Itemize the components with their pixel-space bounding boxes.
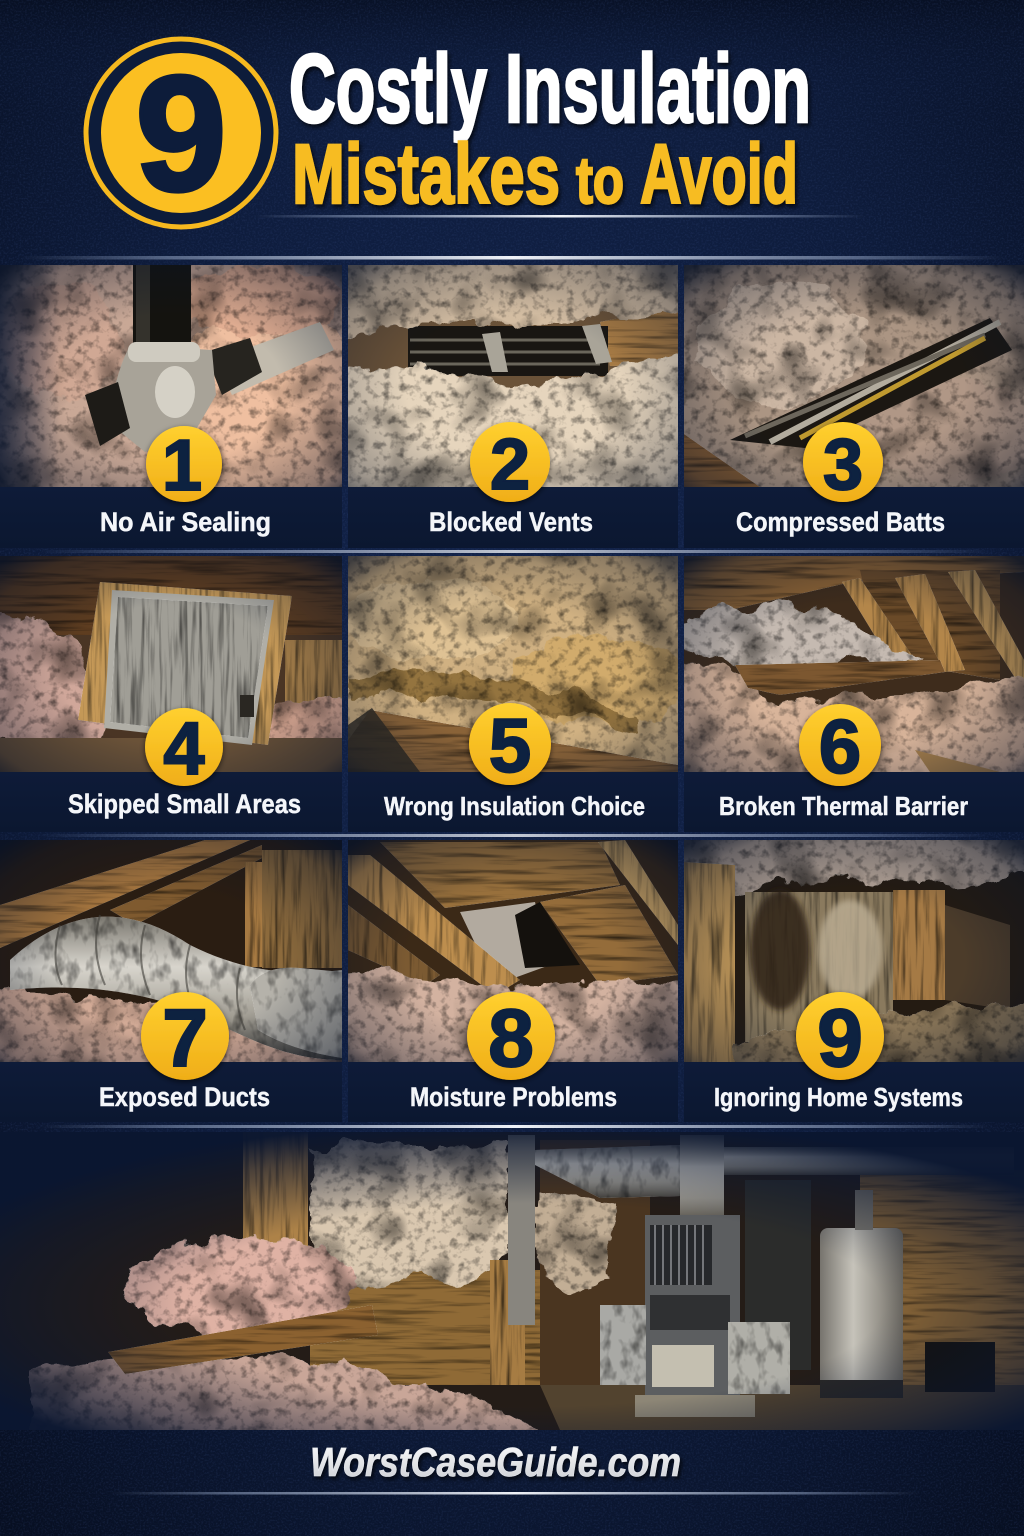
photo: moldy framing: [684, 840, 1024, 1062]
label band: [0, 1062, 342, 1122]
number badge 7: [141, 992, 229, 1084]
number badge 1: 1: [162, 426, 202, 506]
label: exposed ducts: Exposed Ducts: [99, 1082, 270, 1112]
photo: attic access door: [0, 550, 360, 772]
panel 7: exposed ducts: [0, 840, 360, 1122]
number badge 6: [799, 704, 881, 790]
title line two: Avoid: [640, 127, 798, 221]
photo: matted yellow insulation: [348, 556, 678, 772]
label band: [684, 487, 1024, 548]
label: wrong insulation choice: Wrong Insulation Choice: [384, 791, 645, 821]
label: blocked vents: Blocked Vents: [429, 507, 593, 537]
panel 1: no air sealing: [0, 265, 342, 548]
osb back walls: [310, 1140, 1024, 1385]
label: broken thermal barrier: Broken Thermal Barrier: [719, 791, 968, 821]
number badge 5: 5: [489, 704, 531, 789]
label: compressed batts: Compressed Batts: [736, 507, 945, 537]
panel 4: skipped small areas: [0, 550, 360, 832]
photo: attic rafters and damp insulation: [348, 840, 678, 1062]
footer website: WorstCaseGuide.com: [310, 1439, 681, 1485]
number badge 4: 4: [163, 707, 205, 790]
number badge 1: [146, 426, 222, 506]
furnace: [600, 1180, 811, 1417]
number badge 8: [467, 992, 555, 1084]
floor: [540, 1385, 1024, 1430]
label band: [348, 1062, 678, 1122]
panel 9: ignoring home systems: [684, 840, 1024, 1122]
number nine emblem: 9: [135, 42, 227, 225]
title line two: Mistakes: [292, 127, 560, 221]
wooden stud: [243, 1136, 308, 1246]
label: no air sealing: No Air Sealing: [100, 507, 271, 537]
label band: [348, 772, 678, 832]
number badge 5: [469, 703, 551, 789]
number badge 2: [470, 422, 550, 505]
label band: [684, 1062, 1024, 1122]
panel 3: compressed batts: [684, 265, 1024, 548]
dark storage box: [925, 1342, 995, 1392]
photo: vent buried in insulation: [348, 265, 678, 487]
label: ignoring home systems: Ignoring Home Systems: [714, 1082, 963, 1112]
pink insulation pile: [125, 1235, 355, 1335]
number badge 8: 8: [488, 993, 534, 1084]
panel 6: broken thermal barrier: [665, 556, 1024, 832]
corner post: [490, 1135, 535, 1385]
label: moisture problems: Moisture Problems: [410, 1082, 617, 1112]
label band: [684, 772, 1024, 832]
number badge 7: 7: [162, 993, 208, 1084]
lower insulation: [28, 1352, 538, 1430]
number badge 2: 2: [490, 425, 530, 505]
photo: foil duct in attic: [0, 840, 342, 1062]
panel 5: wrong insulation choice: [348, 556, 678, 832]
label band: [0, 487, 342, 548]
photo: gap in attic insulation: [684, 556, 1024, 772]
panel 2: blocked vents: [348, 265, 678, 548]
water heater: [820, 1190, 903, 1398]
number badge 3: 3: [823, 425, 863, 505]
label band: [0, 772, 342, 832]
photo vignette: [0, 1132, 1024, 1430]
photo: batts compressed by cables: [684, 265, 1024, 487]
title line two: to: [576, 143, 624, 217]
label band: [348, 487, 678, 548]
panel 8: moisture problems: [348, 840, 678, 1122]
number nine emblem: [86, 39, 276, 227]
number badge 9: [796, 992, 884, 1084]
number badge 6: 6: [819, 705, 861, 790]
label: skipped small areas: Skipped Small Areas: [68, 789, 301, 819]
hanging insulation: [310, 1145, 510, 1288]
wooden beam: [108, 1305, 378, 1374]
wide photo: basement with insulation and mechanical systems: [0, 1132, 1024, 1445]
photo: pipe through insulation: [0, 265, 342, 487]
number badge 4: [145, 707, 223, 790]
hanging insulation right: [535, 1190, 615, 1290]
number badge 3: [803, 422, 883, 505]
header: [86, 34, 811, 227]
number badge 9: 9: [817, 993, 863, 1084]
ducts: [535, 1135, 944, 1215]
